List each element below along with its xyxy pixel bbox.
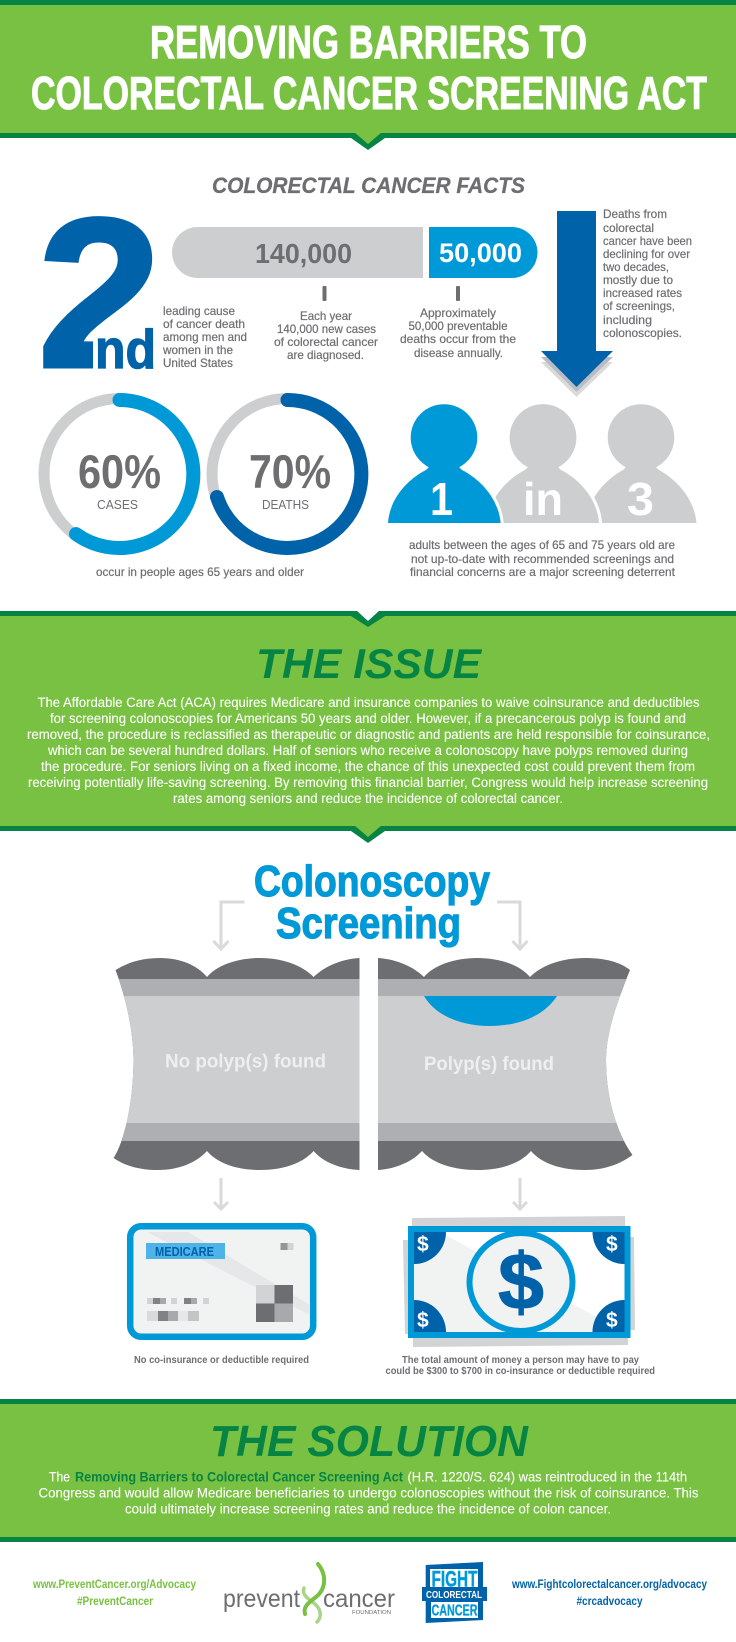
stat: 2nd leading cause [37, 174, 247, 413]
text: deaths declining: colonoscopies. [603, 326, 682, 340]
stat: 2nd leading cause: 2 [37, 174, 162, 413]
text: preventable deaths: 50,000 preventable [408, 319, 508, 333]
footer: prevent cancer links: www.PreventCancer.org/Advocacy [32, 1579, 197, 1591]
heading: colonoscopy screening: Screening [276, 899, 461, 948]
title: REMOVING BARRIERS TO [150, 16, 587, 68]
donut chart: 60% cases: 60% [78, 445, 161, 498]
logo: fight colorectal cancer: CANCER [432, 1602, 478, 1620]
text: solution paragraph: (H.R. 1220/S. 624) was reintroduced in the 114th [408, 1470, 687, 1484]
text: deaths declining [603, 207, 692, 340]
bar segment: 140,000: 140,000 [255, 238, 352, 269]
arrow: no polyps to medicare card [214, 1178, 228, 1209]
text: leading cause: among men and [163, 330, 247, 344]
text: solution paragraph: could ultimately increase screening rates and reduce the incidence of colon cancer. [125, 1502, 611, 1516]
text: issue paragraph: which can be several hundred dollars. Half of seniors who receive a colonoscopy have polyps removed during [47, 743, 688, 758]
arrow: screening to polyps [497, 902, 528, 949]
text: issue paragraph: rates among seniors and reduce the incidence of colorectal cancer. [173, 791, 563, 806]
text: issue paragraph: the procedure. For seniors living on a fixed income, the chance of this unexpected cost could prevent them from [41, 759, 695, 774]
icon: dollar bill [403, 1216, 635, 1347]
donut chart: 70% deaths [212, 398, 363, 550]
caption: no co-insurance: No co-insurance or deductible required [134, 1354, 309, 1366]
text: issue paragraph: The Affordable Care Act (ACA) requires Medicare and insurance companies to waive coinsurance and deductibles [38, 695, 700, 710]
text: deaths declining: cancer have been [603, 234, 692, 248]
text: issue paragraph: receiving potentially life-saving screening. By removing this financial barrier, Congress would help increase screening [28, 775, 708, 790]
footer: fight colorectal cancer links: #crcadvocacy [576, 1596, 643, 1608]
pictogram: 1 in 3 people [388, 404, 696, 525]
bar segment: 50,000: 50,000 [439, 238, 522, 268]
text: preventable deaths [400, 286, 516, 360]
bar segment: 140,000 [172, 227, 423, 278]
icon: dollar bill: $ [417, 1309, 429, 1332]
text: solution paragraph: Removing Barriers to Colorectal Cancer Screening Act [75, 1470, 403, 1484]
header banner [0, 0, 736, 150]
title [31, 16, 707, 119]
heading: colonoscopy screening: Colonoscopy [254, 857, 490, 906]
diagram: colon with polyp [378, 958, 632, 1170]
donut chart: 70% deaths: 70% [249, 445, 331, 498]
person 3: 3 [627, 473, 654, 525]
icon: dollar bill: $ [606, 1309, 618, 1332]
logo: fight colorectal cancer: COLORECTAL [426, 1589, 482, 1601]
text: preventable deaths: deaths occur from the [400, 332, 516, 346]
text: solution paragraph: Congress and would allow Medicare beneficiaries to undergo colonoscopies without the risk of coinsurance. This [38, 1486, 699, 1500]
caption: adults not up to date: not up-to-date with recommended screenings and [411, 552, 674, 566]
text: new cases diagnosed: Each year [300, 309, 352, 323]
text: leading cause: of cancer death [163, 317, 245, 331]
text: issue paragraph [27, 695, 710, 806]
logo: fight colorectal cancer [422, 1562, 487, 1623]
bar segment: 50,000 [429, 227, 538, 278]
text: deaths declining: of screenings, [603, 299, 675, 313]
label: polyps found: Polyp(s) found [424, 1054, 554, 1075]
footer: fight colorectal cancer links [511, 1579, 708, 1608]
person 2 [487, 404, 599, 525]
text: solution paragraph [38, 1470, 699, 1516]
text: deaths declining: declining for over [603, 247, 690, 261]
person 1 highlighted: 1 [430, 473, 453, 525]
label: no polyps found: No polyp(s) found [165, 1052, 326, 1072]
caption: total amount of money: could be $300 to $700 in co-insurance or deductible required [386, 1365, 655, 1377]
text: new cases diagnosed: of colorectal cancer [274, 335, 378, 349]
text: deaths declining: two decades, [603, 260, 669, 274]
arrow: polyps to money [513, 1178, 527, 1209]
text: issue paragraph: removed, the procedure is reclassified as therapeutic or diagnostic and patients are held responsible for coinsurance, [27, 727, 710, 742]
caption: total amount of money [386, 1354, 655, 1377]
icon: dollar bill: $ [417, 1233, 429, 1256]
heading: colorectal cancer facts: COLORECTAL CANCER FACTS [212, 173, 525, 198]
text: deaths declining: increased rates [603, 286, 682, 300]
logo: prevent cancer foundation: FOUNDATION [352, 1610, 391, 1616]
person 1 highlighted [388, 404, 501, 525]
caption: adults not up to date: financial concerns are a major screening deterrent [410, 565, 676, 579]
footer: prevent cancer links: #PreventCancer [77, 1596, 153, 1608]
person 2: in [523, 473, 563, 525]
caption: adults not up to date [409, 538, 676, 579]
footer: prevent cancer links [32, 1579, 197, 1608]
text: deaths declining: colorectal [603, 221, 654, 235]
text: preventable deaths: Approximately [420, 306, 496, 320]
text: leading cause: women in the [162, 343, 233, 357]
icon: declining arrow [541, 211, 613, 397]
diagram: colon without polyps [114, 958, 360, 1170]
panel: the issue [0, 610, 736, 843]
text: deaths declining: Deaths from [603, 207, 667, 221]
caption: ages 65 and older: occur in people ages 65 years and older [96, 565, 304, 579]
arrow: screening to no polyps [214, 902, 244, 949]
heading: colonoscopy screening [254, 857, 490, 948]
caption: total amount of money: The total amount of money a person may have to pay [402, 1354, 639, 1366]
panel: the solution [0, 1399, 736, 1542]
footer: fight colorectal cancer links: www.Fightcolorectalcancer.org/advocacy [511, 1579, 708, 1591]
text: leading cause: United States [163, 356, 233, 370]
logo: prevent cancer foundation [223, 1564, 395, 1622]
icon: dollar bill: $ [606, 1233, 618, 1256]
logo: prevent cancer foundation: prevent [223, 1585, 300, 1613]
text: leading cause [162, 304, 247, 370]
stat: 2nd leading cause: nd [95, 318, 156, 380]
logo: prevent cancer foundation: cancer [323, 1585, 395, 1613]
caption: adults not up to date: adults between the ages of 65 and 75 years old are [409, 538, 675, 552]
polyp [424, 996, 557, 1026]
person 3 [586, 404, 696, 525]
bar: 140,000 cases vs 50,000 deaths [172, 227, 538, 278]
heading: the solution: THE SOLUTION [210, 1417, 529, 1466]
medicare label: MEDICARE [155, 1245, 214, 1259]
text: preventable deaths: disease annually. [414, 346, 503, 360]
icon: helix [303, 1564, 324, 1622]
donut chart: 70% deaths: DEATHS [262, 497, 309, 512]
heading: the issue: THE ISSUE [256, 640, 483, 687]
donut chart: 60% cases: CASES [97, 497, 138, 512]
logo: fight colorectal cancer: FIGHT [432, 1566, 478, 1592]
text: new cases diagnosed: 140,000 new cases [277, 322, 376, 336]
icon: dollar bill: $ [498, 1237, 544, 1326]
text: new cases diagnosed [274, 286, 378, 362]
text: deaths declining: mostly due to [603, 273, 673, 287]
donut chart: 60% cases [44, 398, 195, 550]
text: deaths declining: including [603, 313, 652, 327]
icon: medicare card [130, 1226, 313, 1337]
text: leading cause: leading cause [163, 304, 235, 318]
text: issue paragraph: for screening colonoscopies for Americans 50 years and older. However, if a precancerous polyp is found and [50, 711, 686, 726]
text: solution paragraph: The [49, 1470, 70, 1484]
text: new cases diagnosed: are diagnosed. [287, 348, 364, 362]
